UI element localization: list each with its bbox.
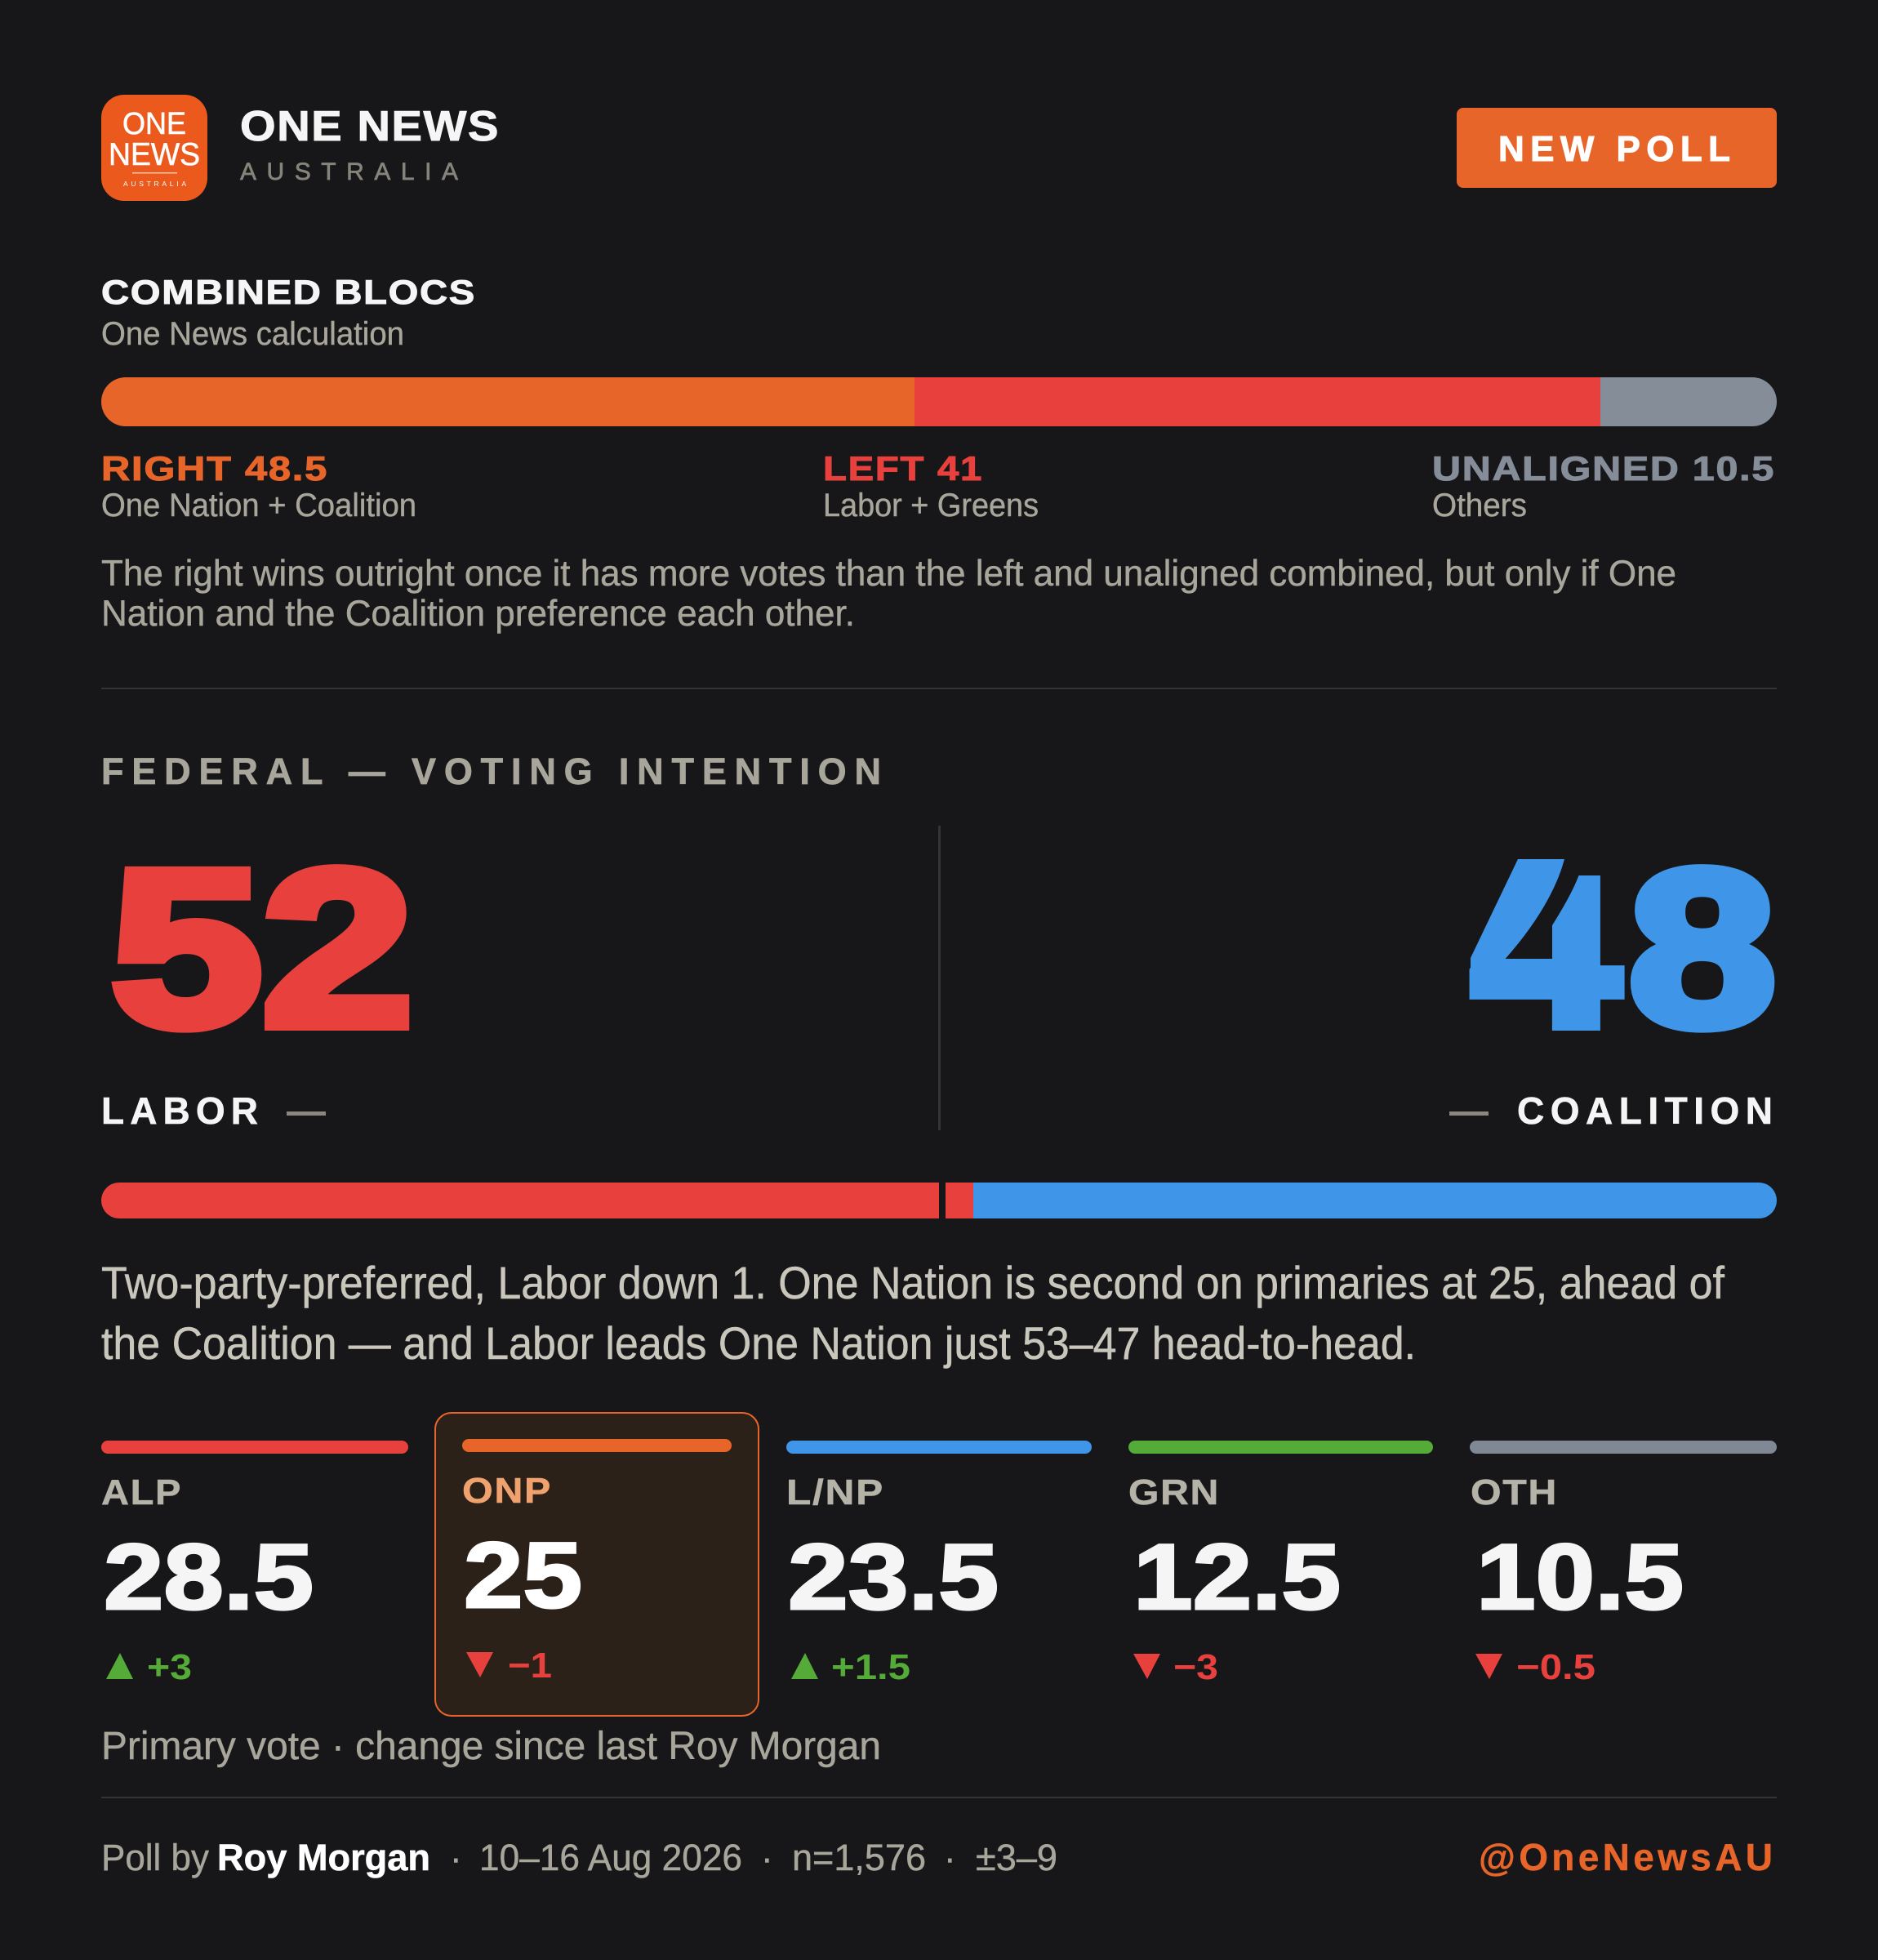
tile: GRN: −3: [1173, 1647, 1218, 1687]
tile: GRN: [1128, 1441, 1433, 1687]
tile: ALP: [101, 1441, 408, 1687]
tile: ONP highlighted: ONP: [462, 1471, 552, 1511]
explanatory text: [101, 554, 1676, 634]
panel: federal voting intention: [101, 751, 1777, 1369]
tile: L/NP: 23.5: [788, 1526, 999, 1629]
primary vote tiles: [101, 1413, 1777, 1716]
label: right: RIGHT 48.5: [101, 449, 328, 488]
label: left: Labor + Greens: [823, 488, 1039, 523]
summary text: the Coalition — and Labor leads One Nation just 53–47 head-to-head.: [101, 1318, 1416, 1369]
tile: ALP: 28.5: [104, 1526, 314, 1629]
center divider: [938, 826, 941, 1130]
label: unaligned: UNALIGNED 10.5: [1432, 449, 1775, 488]
explanatory text: Nation and the Coalition preference each other.: [101, 594, 855, 634]
poll credit: ·: [944, 1838, 956, 1878]
figure: Labor 52: 52: [111, 824, 413, 1072]
label: right: [101, 449, 416, 523]
figure: Coalition 48: [1449, 824, 1776, 1132]
tiles caption: Primary vote · change since last Roy Morgan: [101, 1725, 881, 1768]
poll credit: ·: [761, 1838, 773, 1878]
heading: FEDERAL — VOTING INTENTION: [101, 751, 881, 792]
poll credit: ·: [450, 1838, 462, 1878]
figure: Coalition 48: COALITION: [1517, 1089, 1773, 1132]
tile: ONP highlighted: [435, 1413, 759, 1716]
badge: new poll: NEW POLL: [1498, 129, 1730, 169]
heading: COMBINED BLOCS: [101, 273, 476, 311]
two-party bar: [101, 1183, 1777, 1218]
icon: One News logo: [101, 95, 207, 201]
icon: One News logo: NEWS: [109, 137, 200, 172]
tile: OTH: [1470, 1441, 1777, 1687]
tile: L/NP: L/NP: [786, 1472, 884, 1512]
tile: ALP: +3: [147, 1647, 192, 1687]
label: unaligned: [1432, 449, 1775, 523]
tile: L/NP: [786, 1441, 1092, 1687]
subheading: One News calculation: [101, 316, 404, 352]
poll credit: [101, 1837, 1057, 1878]
poll credit: Poll by: [101, 1837, 209, 1878]
poll credit: 10–16 Aug 2026: [479, 1837, 742, 1878]
header: [101, 95, 1777, 201]
poll credit: n=1,576: [792, 1837, 926, 1878]
label: right: One Nation + Coalition: [101, 488, 416, 523]
tile: ALP: ALP: [101, 1472, 182, 1512]
figure: Labor 52: LABOR: [101, 1089, 258, 1132]
icon: One News logo: AUSTRALIA: [123, 180, 186, 188]
tile: GRN: 12.5: [1133, 1526, 1341, 1629]
label: unaligned: Others: [1432, 488, 1527, 523]
label: left: [823, 449, 1039, 523]
tile: ONP highlighted: 25: [464, 1524, 582, 1628]
tile: L/NP: +1.5: [831, 1647, 910, 1687]
social handle: @OneNewsAU: [1479, 1836, 1773, 1878]
stacked bar: blocs: [101, 377, 1777, 426]
tile: OTH: OTH: [1471, 1472, 1558, 1512]
tile: GRN: GRN: [1128, 1472, 1220, 1512]
explanatory text: The right wins outright once it has more votes than the left and unaligned combined, but only if One: [101, 554, 1676, 594]
summary text: [101, 1258, 1725, 1369]
tile: ONP highlighted: −1: [508, 1646, 552, 1686]
footer: [101, 1836, 1773, 1878]
brand name: ONE NEWS: [240, 103, 500, 150]
brand subtitle: AUSTRALIA: [240, 158, 458, 185]
panel: combined blocs: [101, 273, 1777, 634]
tile: OTH: 10.5: [1476, 1526, 1684, 1629]
figure: Labor 52: [101, 824, 413, 1132]
tile: OTH: −0.5: [1516, 1647, 1595, 1687]
summary text: Two-party-preferred, Labor down 1. One Nation is second on primaries at 25, ahead of: [101, 1258, 1725, 1308]
poll credit: Roy Morgan: [217, 1837, 430, 1878]
icon: One News logo: ONE: [122, 107, 186, 141]
badge: new poll: [1457, 108, 1777, 188]
figure: Coalition 48: 48: [1472, 824, 1776, 1072]
poll credit: ±3–9: [976, 1837, 1057, 1878]
label: left: LEFT 41: [823, 449, 983, 488]
